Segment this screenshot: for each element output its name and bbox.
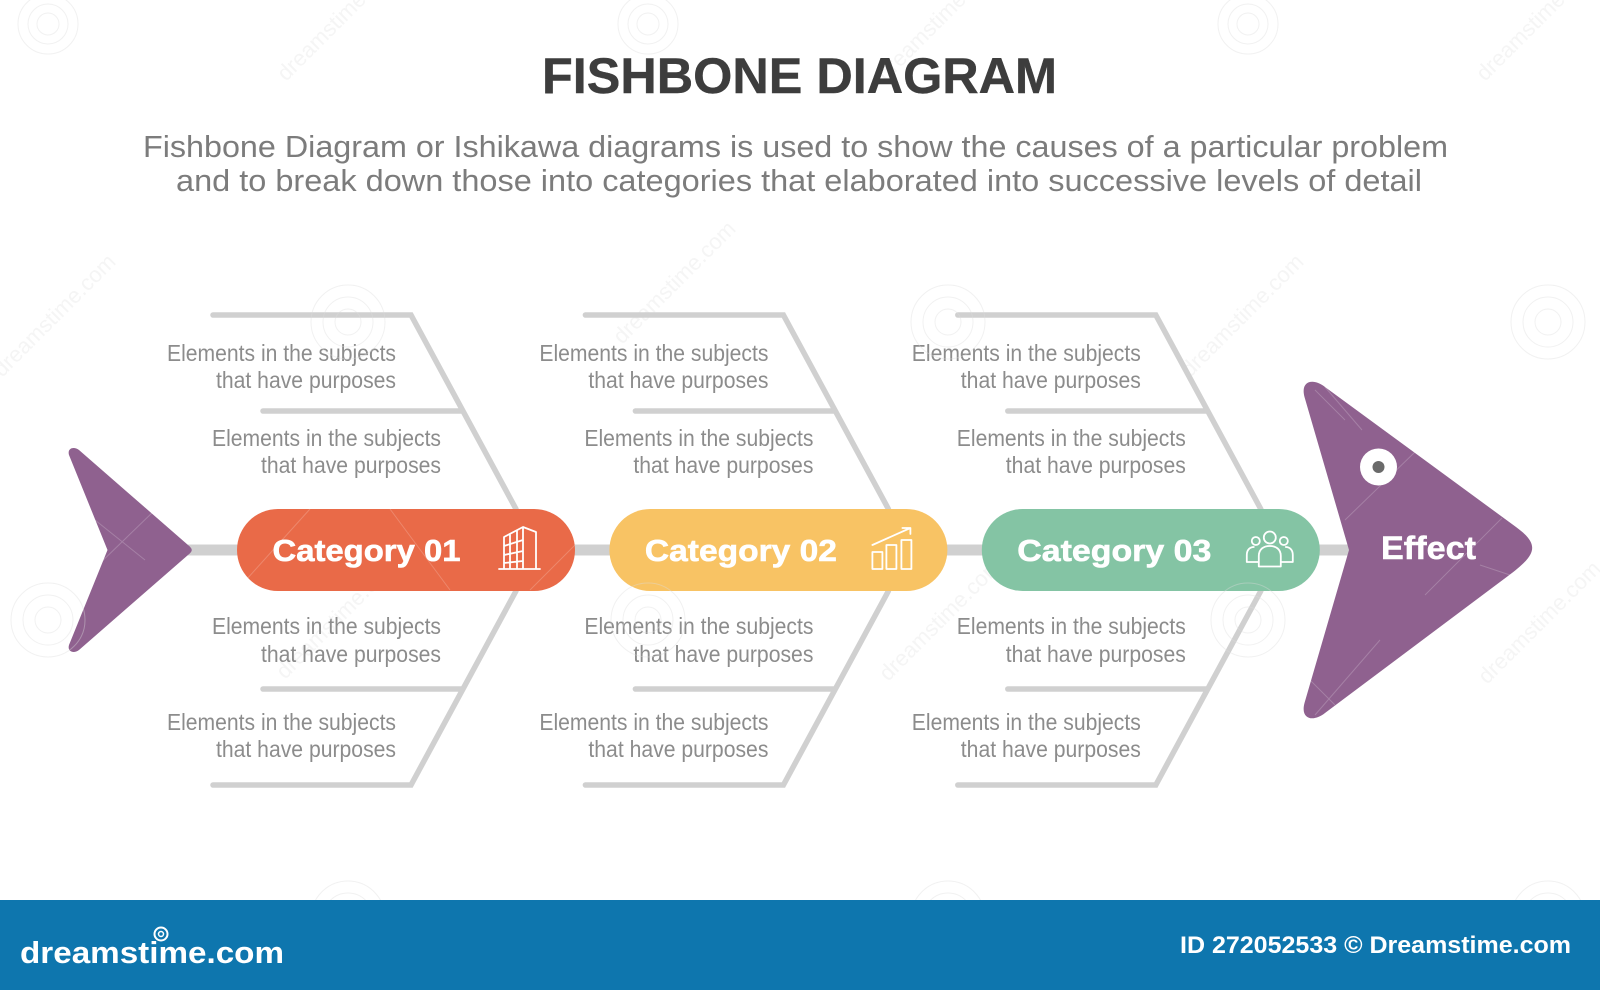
- text block: lower middle 1: [584, 613, 813, 667]
- footer logo: dreamstime.com: [20, 935, 284, 970]
- label: category 03: Category 03: [1017, 533, 1211, 568]
- bones: category 02: [585, 315, 888, 785]
- text block: upper left 1: that have purposes: [216, 367, 396, 393]
- text block: lower left 1: that have purposes: [261, 641, 441, 667]
- subtitle text: [143, 129, 1448, 198]
- spine: [185, 544, 1355, 556]
- watermark text: [0, 0, 1600, 689]
- text block: lower left 2: [167, 709, 396, 762]
- text block: upper middle 1: Elements in the subjects: [539, 340, 768, 366]
- text block: upper middle 1: [539, 340, 768, 393]
- text block: lower middle 1: Elements in the subjects: [584, 613, 813, 639]
- text block: lower left 2: that have purposes: [216, 736, 396, 762]
- text block: lower middle 2: that have purposes: [588, 736, 768, 762]
- text block: upper left 1: Elements in the subjects: [167, 340, 396, 366]
- label: category 01: Category 01: [272, 533, 460, 568]
- pill: category 01: [237, 509, 575, 591]
- label: effect: Effect: [1381, 530, 1476, 566]
- fish head: [1304, 382, 1532, 718]
- subtitle text: Fishbone Diagram or Ishikawa diagrams is used to show the causes of a particular problem: [143, 129, 1448, 164]
- bones: category 03: [958, 315, 1261, 785]
- text block: upper middle 1: that have purposes: [588, 367, 768, 393]
- text block: upper right 1: [912, 340, 1141, 393]
- text block: upper right 1: that have purposes: [961, 367, 1141, 393]
- text block: lower middle 2: Elements in the subjects: [539, 709, 768, 735]
- eye: [1360, 448, 1397, 486]
- text block: upper left 2: [212, 425, 441, 478]
- title: FISHBONE DIAGRAM: [542, 48, 1057, 104]
- watermark text: dreamstime.com: [874, 553, 1007, 686]
- watermark text: dreamstime.com: [608, 216, 741, 349]
- fish tail: [69, 448, 192, 652]
- pill: category 03: [982, 509, 1320, 591]
- icon: building: [499, 527, 540, 569]
- text block: lower right 1: [957, 613, 1186, 667]
- text block: lower middle 1: that have purposes: [633, 641, 813, 667]
- text block: upper left 2: Elements in the subjects: [212, 425, 441, 451]
- text block: lower right 2: [912, 709, 1141, 762]
- label: category 02: Category 02: [645, 533, 837, 568]
- icon: group of people: [1247, 532, 1293, 566]
- text block: lower right 2: Elements in the subjects: [912, 709, 1141, 735]
- text block: upper right 2: Elements in the subjects: [957, 425, 1186, 451]
- footer bar: [0, 900, 1600, 990]
- text block: lower middle 2: [539, 709, 768, 762]
- text block: upper left 1: [167, 340, 396, 393]
- icon: bar chart with arrow: [872, 528, 911, 569]
- text block: upper right 2: [957, 425, 1186, 478]
- text block: lower right 2: that have purposes: [961, 736, 1141, 762]
- bones: category 01: [213, 315, 516, 785]
- text block: lower right 1: that have purposes: [1006, 641, 1186, 667]
- text block: lower left 2: Elements in the subjects: [167, 709, 396, 735]
- watermark text: dreamstime.com: [271, 551, 404, 684]
- footer credit: ID 272052533 © Dreamstime.com: [1180, 932, 1571, 959]
- watermark text: dreamstime.com: [1176, 249, 1309, 382]
- panel: category 02 branch: [539, 315, 947, 785]
- subtitle text: and to break down those into categories that elaborated into successive levels of detail: [176, 163, 1422, 198]
- text block: upper middle 2: that have purposes: [633, 452, 813, 478]
- panel: category 01 branch: [167, 315, 575, 785]
- text block: upper middle 2: Elements in the subjects: [584, 425, 813, 451]
- text block: upper right 2: that have purposes: [1006, 452, 1186, 478]
- text block: lower right 1: Elements in the subjects: [957, 613, 1186, 639]
- text block: lower left 1: [212, 613, 441, 667]
- pill: category 02: [609, 509, 947, 591]
- text block: upper left 2: that have purposes: [261, 452, 441, 478]
- head shape: [1304, 382, 1532, 718]
- text block: upper middle 2: [584, 425, 813, 478]
- text block: upper right 1: Elements in the subjects: [912, 340, 1141, 366]
- text block: lower left 1: Elements in the subjects: [212, 613, 441, 639]
- panel: category 03 branch: [912, 315, 1320, 785]
